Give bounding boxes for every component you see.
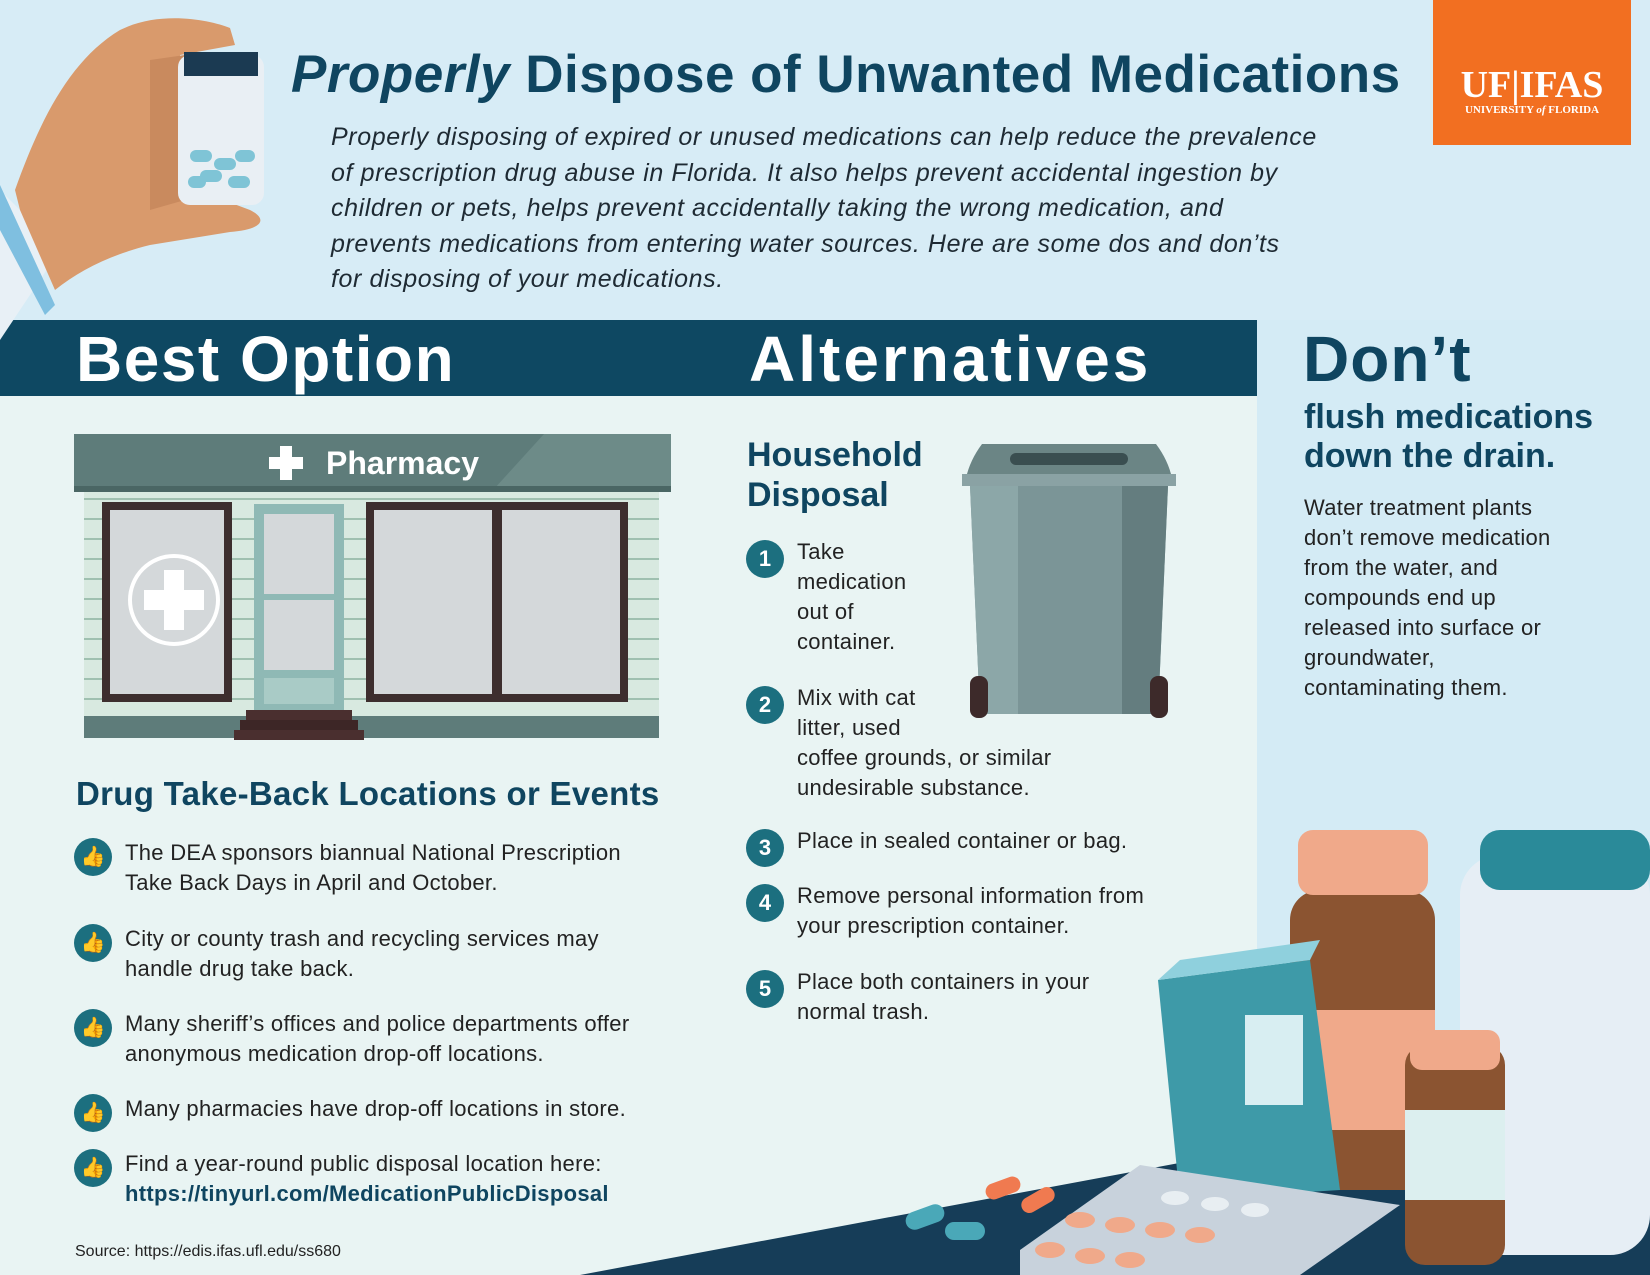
subheading: flush medications: down the drain. — [1304, 437, 1555, 475]
steps list: Place both containers in your — [797, 969, 1089, 994]
steps list: Remove personal information from — [797, 883, 1144, 908]
right column background — [1257, 320, 1650, 1275]
bullet list: take-back options: anonymous medication drop-off locations. — [125, 1041, 544, 1066]
heading: Household Disposal — [747, 436, 923, 514]
text: don't explanation: compounds end up — [1304, 585, 1496, 610]
steps list: medication — [797, 569, 906, 594]
illustration: medications on table — [580, 830, 1650, 1275]
logo: UF IFAS: UF|IFAS — [1461, 64, 1603, 106]
bullet list: take-back options: 👍 — [81, 1017, 105, 1039]
logo: UF IFAS — [1433, 0, 1631, 145]
bullet list: take-back options: Find a year-round public disposal location here: — [125, 1151, 602, 1176]
logo: UF IFAS: UNIVERSITY of FLORIDA — [1465, 104, 1599, 116]
bullet list: take-back options: Many pharmacies have drop-off locations in store. — [125, 1096, 626, 1121]
intro paragraph: for disposing of your medications. — [331, 265, 724, 293]
heading: Drug Take-Back Locations: Drug Take-Back Locations or Events — [76, 775, 660, 812]
text: don't explanation — [1304, 495, 1551, 700]
intro paragraph: Properly disposing of expired or unused medications can help reduce the prevalence — [331, 123, 1317, 151]
bullet list: take-back options: 👍 — [81, 1157, 105, 1179]
text: don't explanation: don’t remove medication — [1304, 525, 1551, 550]
intro paragraph: children or pets, helps prevent accidentally taking the wrong medication, and — [331, 194, 1224, 222]
step 3 — [746, 828, 1127, 867]
illustration: trash can — [962, 444, 1176, 718]
heading: Best Option: Best Option — [76, 323, 455, 395]
text: don't explanation: groundwater, — [1304, 645, 1435, 670]
steps list: undesirable substance. — [797, 775, 1030, 800]
bullet list: take-back options: 👍 — [81, 846, 105, 868]
steps list: Place in sealed container or bag. — [797, 828, 1127, 853]
dark header band — [0, 320, 1257, 396]
subheading: flush medications: flush medications — [1304, 398, 1593, 436]
bullet list: take-back options: The DEA sponsors biannual National Prescription — [125, 840, 621, 865]
bullet list: take-back options: Take Back Days in April and October. — [125, 870, 498, 895]
heading: Household Disposal: Household — [747, 436, 923, 474]
heading: Don't: Don’t — [1303, 323, 1472, 395]
steps list: 1 — [759, 546, 771, 571]
steps list: 2 — [759, 692, 771, 717]
bullet list: take-back options — [74, 838, 629, 1206]
intro paragraph — [330, 123, 1317, 293]
heading: Household Disposal: Disposal — [747, 476, 889, 514]
heading: Alternatives: Alternatives — [749, 323, 1151, 395]
step 2 — [746, 685, 1051, 800]
step 5 — [746, 969, 1089, 1024]
bullet list: take-back options: https://tinyurl.com/MedicationPublicDisposal — [125, 1181, 609, 1206]
intro paragraph: prevents medications from entering water sources. Here are some dos and don’ts — [331, 230, 1280, 258]
step 4 — [746, 883, 1144, 938]
steps list: litter, used — [797, 715, 901, 740]
steps list: normal trash. — [797, 999, 929, 1024]
bullet list: take-back options: 👍 — [81, 1102, 105, 1124]
steps list: 5 — [759, 976, 771, 1001]
bullet list: take-back options: City or county trash and recycling services may — [125, 926, 599, 951]
steps list: 4 — [759, 890, 771, 915]
text: don't explanation: contaminating them. — [1304, 675, 1508, 700]
text: don't explanation: from the water, and — [1304, 555, 1498, 580]
bullet list: take-back options: handle drug take back. — [125, 956, 354, 981]
step 1 — [746, 539, 906, 654]
source: Source: https://edis.ifas.ufl.edu/ss680 — [75, 1243, 341, 1260]
steps list — [746, 539, 1144, 1024]
illustration: hand holding pill bottle — [0, 18, 264, 340]
steps list: coffee grounds, or similar — [797, 745, 1051, 770]
text: don't explanation: Water treatment plants — [1304, 495, 1532, 520]
illustration: pharmacy: Pharmacy — [326, 445, 479, 481]
title: Properly Dispose of Unwanted Medications — [291, 45, 1401, 104]
bullet list: take-back options: 👍 — [81, 932, 105, 954]
steps list: Take — [797, 539, 845, 564]
steps list: your prescription container. — [797, 913, 1070, 938]
illustration: pharmacy — [74, 434, 671, 740]
steps list: container. — [797, 629, 895, 654]
subheading: flush medications — [1304, 398, 1593, 475]
steps list: Mix with cat — [797, 685, 916, 710]
text: don't explanation: released into surface or — [1304, 615, 1541, 640]
steps list: out of — [797, 599, 854, 624]
lower left panel background — [0, 396, 1257, 1275]
bullet list: take-back options: Many sheriff’s offices and police departments offer — [125, 1011, 629, 1036]
steps list: 3 — [759, 835, 771, 860]
intro paragraph: of prescription drug abuse in Florida. It also helps prevent accidental ingestion by — [331, 158, 1278, 186]
